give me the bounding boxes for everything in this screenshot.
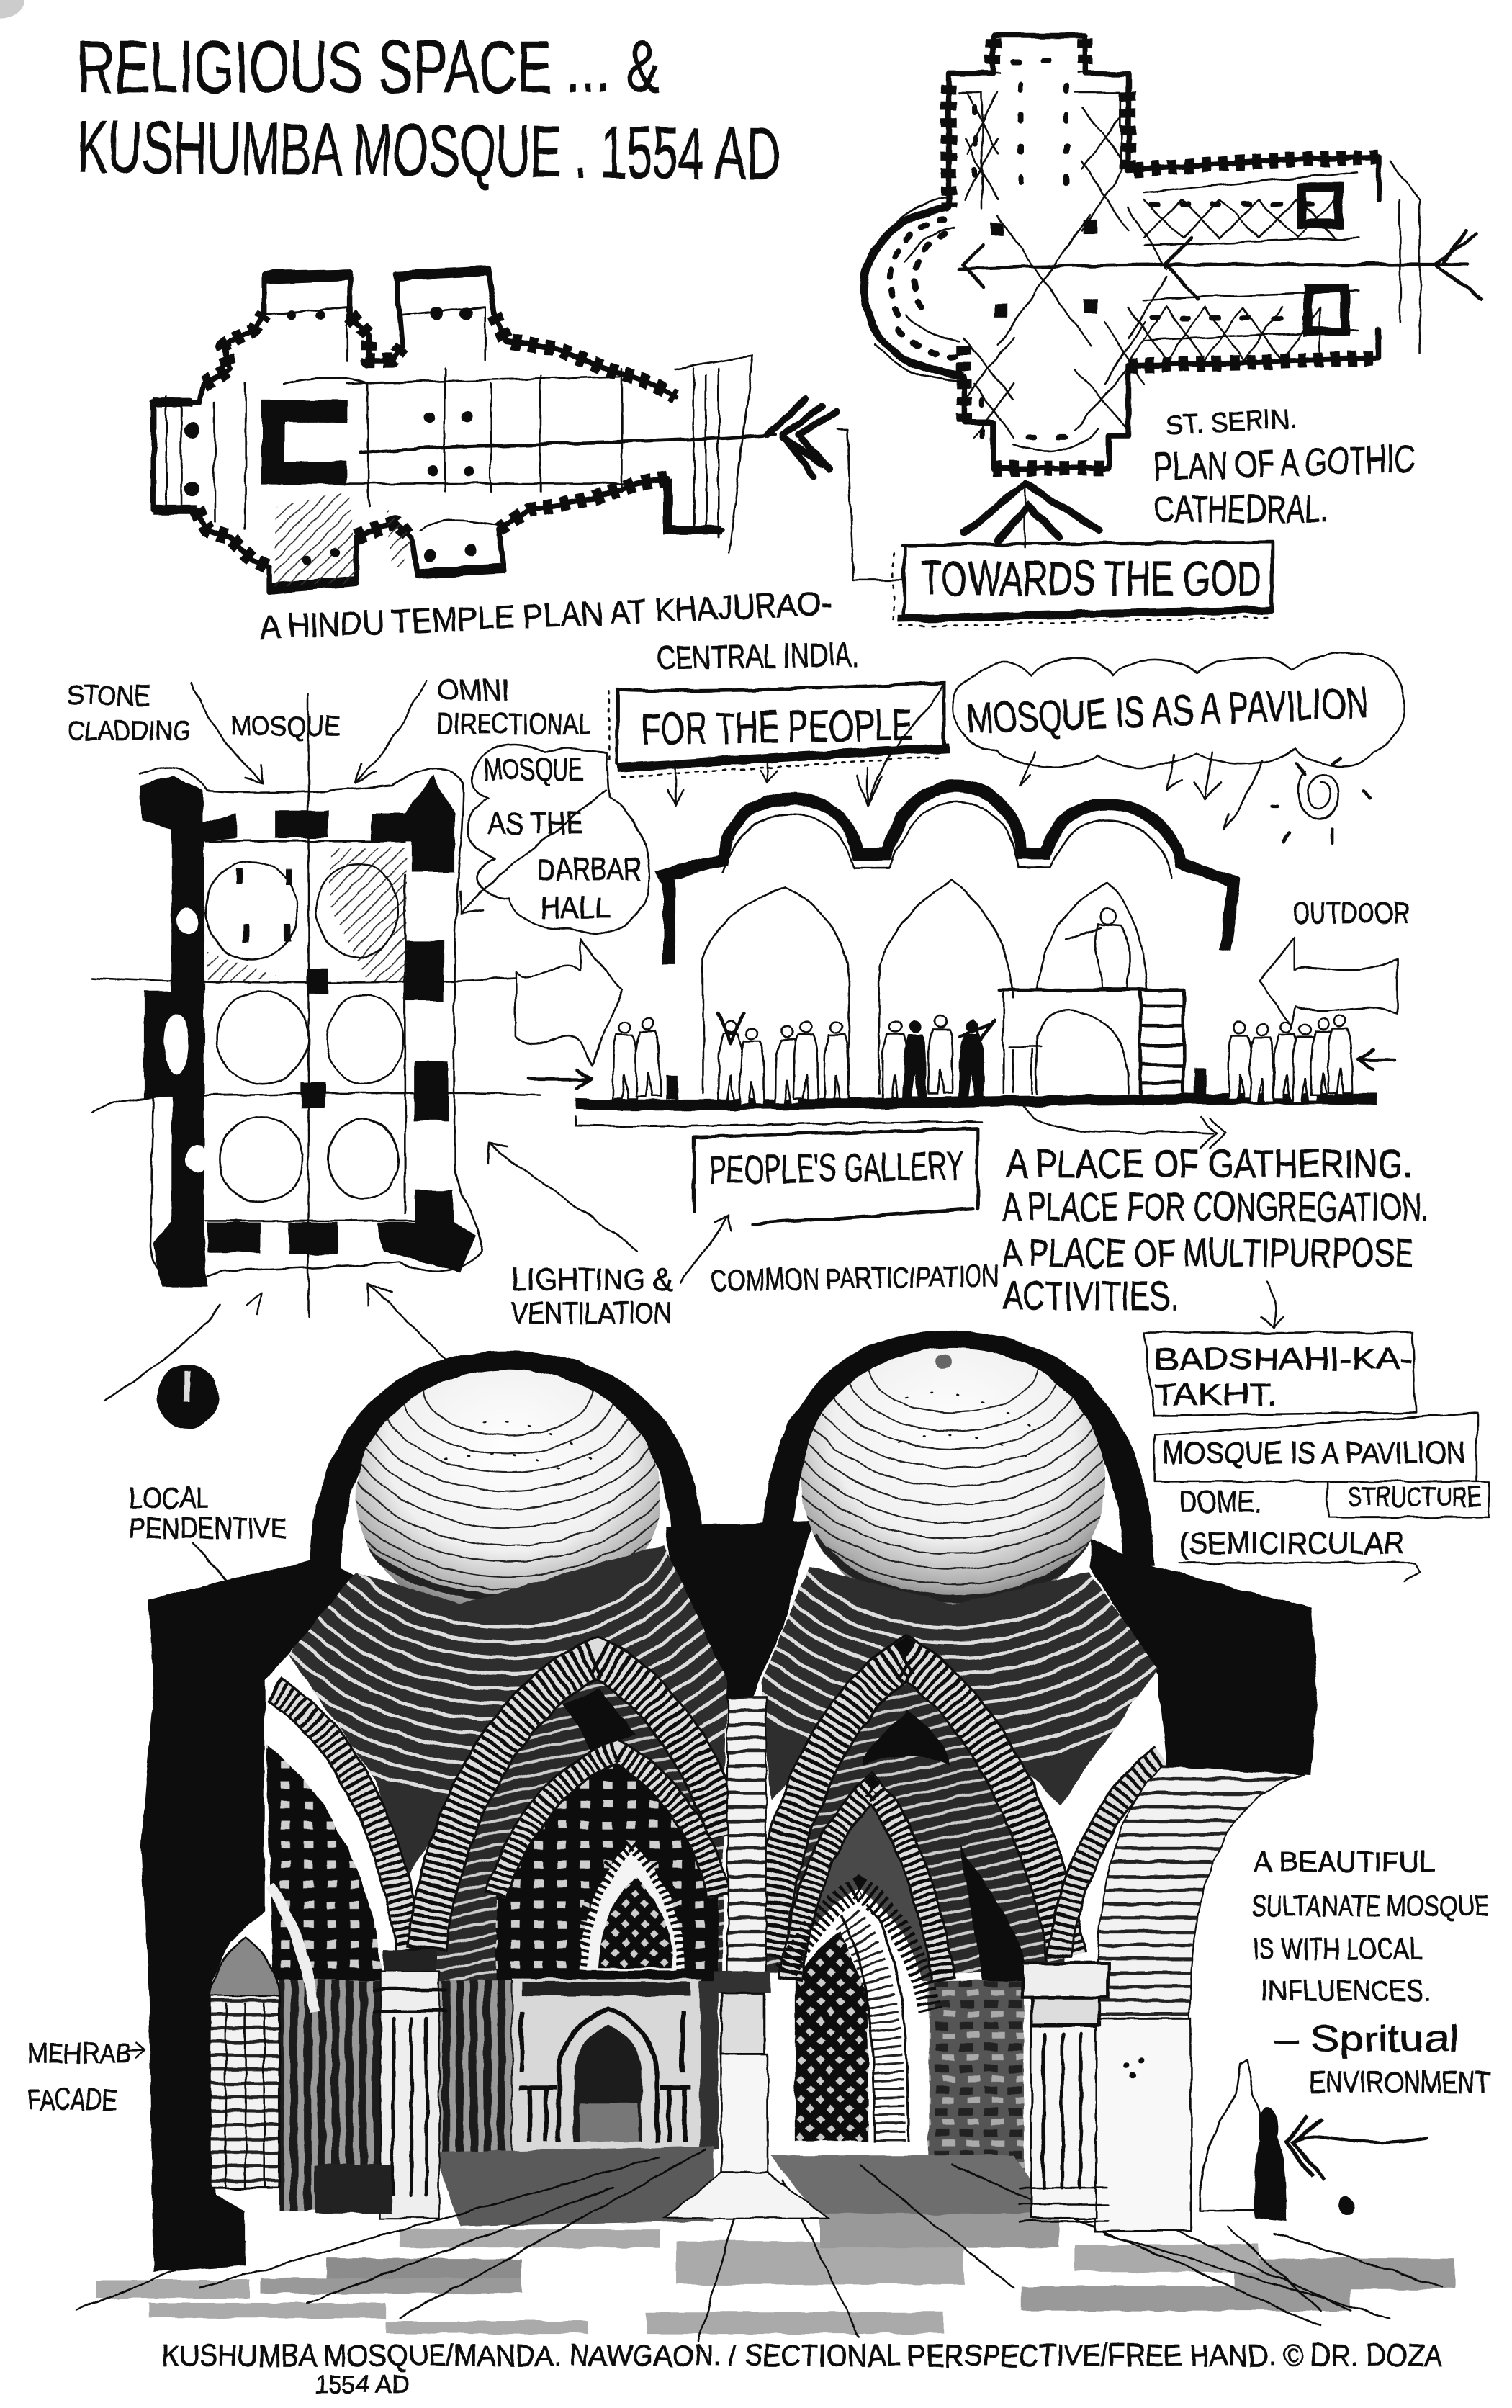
callout: people's gallery	[680, 1128, 978, 1282]
section: mosque as pavilion	[530, 786, 1394, 1149]
caption: drawing credit	[161, 2338, 1444, 2399]
text block: sultanate mosque note: IS WITH LOCAL	[1253, 1932, 1421, 1965]
caption: Gothic cathedral	[1153, 403, 1416, 531]
callout: for the people	[609, 683, 949, 806]
text block: sultanate mosque note: A BEAUTIFUL	[1254, 1845, 1435, 1878]
right bay	[761, 1658, 1067, 2180]
callout: for the people: FOR THE PEOPLE	[641, 700, 914, 755]
caption: Hindu temple: CENTRAL INDIA.	[657, 636, 860, 677]
right stone arch courses	[1097, 1766, 1305, 2019]
labels: participation, lighting and ventilation: VENTILATION	[511, 1296, 672, 1331]
text block: place of gathering: ACTIVITIES.	[1002, 1274, 1179, 1318]
dome right	[762, 1331, 1155, 1605]
caption: Hindu temple	[260, 585, 860, 677]
callout: mosque is a pavilion structure	[1154, 1412, 1489, 1581]
text block: sultanate mosque note	[1251, 1845, 1490, 2100]
arrow: outdoor: OUTDOOR	[1292, 896, 1409, 929]
label: local pendentive	[129, 1481, 287, 1584]
labels around mosque plan: OMNI	[438, 673, 510, 706]
black walls	[141, 1520, 1317, 2272]
floor perspective lines	[77, 2149, 1443, 2341]
title: RELIGIOUS SPACE ... &	[77, 25, 660, 108]
labels around mosque plan: CLADDING	[68, 716, 190, 747]
connector line from temple arrow to box	[837, 430, 903, 580]
caption: Gothic cathedral: ST. SERIN.	[1166, 403, 1297, 441]
title	[76, 25, 780, 195]
labels around mosque plan: MOSQUE	[230, 711, 341, 742]
text block: place of gathering: A PLACE OF GATHERING.	[1005, 1141, 1412, 1186]
pendentive courses left	[289, 1545, 728, 1875]
labels: participation, lighting and ventilation: COMMON PARTICIPATION	[710, 1259, 999, 1298]
plan: Hindu temple at Khajurao	[153, 269, 837, 591]
cloud: mosque as the darbar hall	[461, 745, 649, 935]
dome left	[310, 1350, 702, 1604]
label: mehrab facade	[27, 2036, 144, 2116]
cloud: mosque as the darbar hall: MOSQUE	[484, 752, 583, 787]
callout: people's gallery: PEOPLE'S GALLERY	[708, 1144, 964, 1192]
arrow: outdoor	[1259, 896, 1409, 1025]
label: mehrab facade: FACADE	[27, 2083, 117, 2116]
right column and pier	[1020, 1964, 1191, 2231]
icon: black ball	[156, 1365, 218, 1429]
title: KUSHUMBA MOSQUE . 1554 AD	[76, 105, 780, 195]
callout: mosque is a pavilion structure: MOSQUE IS A PAVILION	[1162, 1436, 1466, 1470]
plan: Gothic cathedral St. Serin	[864, 35, 1481, 540]
label: mehrab facade: MEHRAB	[27, 2036, 132, 2070]
callout: mosque is a pavilion structure: (SEMICIRCULAR	[1179, 1527, 1405, 1561]
labels: participation, lighting and ventilation: LIGHTING &	[511, 1262, 672, 1297]
mihrab facade	[439, 1971, 719, 2157]
caption: Hindu temple: A HINDU TEMPLE PLAN AT KHAJURAO-	[260, 585, 832, 646]
plan: mosque floor plan	[92, 694, 540, 1400]
callout: mosque is a pavilion structure: DOME.	[1179, 1485, 1261, 1519]
callout: badshahi ka takht	[1143, 1333, 1416, 1416]
perspective: Kushumba Mosque interior	[75, 1331, 1456, 2342]
mihrab tower left	[210, 1938, 279, 2188]
arrow: indoor flow into section	[516, 940, 621, 1067]
voussoir arches	[273, 1658, 1162, 2011]
label: local pendentive: LOCAL	[129, 1481, 209, 1514]
label: local pendentive: PENDENTIVE	[129, 1511, 287, 1545]
callout: badshahi ka takht: TAKHT.	[1154, 1378, 1277, 1412]
text block: place of gathering	[1002, 1141, 1429, 1328]
callout: badshahi ka takht: BADSHAHI-KA-	[1154, 1342, 1412, 1377]
labels around mosque plan: STONE	[68, 680, 150, 711]
central pier	[665, 1971, 829, 2219]
cloud: mosque as the darbar hall: AS THE	[488, 807, 583, 841]
caption: Gothic cathedral: PLAN OF A GOTHIC	[1153, 438, 1416, 489]
cloud: mosque is as a pavilion	[953, 653, 1405, 829]
labels around mosque plan: DIRECTIONAL	[438, 707, 591, 740]
pendentive courses right	[762, 1567, 1158, 1806]
box: towards the god: TOWARDS THE GOD	[921, 552, 1261, 606]
people in the gallery	[613, 1013, 1352, 1105]
labels: participation, lighting and ventilation	[488, 1144, 999, 1331]
floor washes	[96, 2146, 1455, 2334]
box: towards the god	[894, 488, 1272, 626]
arrow: towards the god	[964, 484, 1099, 540]
caption: drawing credit: 1554 AD	[315, 2370, 410, 2399]
caption: Gothic cathedral: CATHEDRAL.	[1154, 488, 1328, 531]
central pilaster	[728, 1697, 766, 1973]
text block: sultanate mosque note: – Spritual	[1274, 2018, 1458, 2059]
cloud: mosque as the darbar hall: HALL	[540, 891, 611, 925]
far left bay lattice	[266, 1744, 387, 2211]
cloud: mosque is as a pavilion: MOSQUE IS AS A PAVILION	[966, 678, 1369, 743]
cloud: mosque as the darbar hall: DARBAR	[537, 853, 642, 887]
figures	[1200, 2060, 1428, 2221]
left bay	[423, 1658, 723, 1988]
left column	[315, 1950, 445, 2219]
text block: sultanate mosque note: INFLUENCES.	[1261, 1974, 1431, 2007]
labels around mosque plan	[68, 673, 591, 783]
icon: sun	[1271, 758, 1369, 843]
